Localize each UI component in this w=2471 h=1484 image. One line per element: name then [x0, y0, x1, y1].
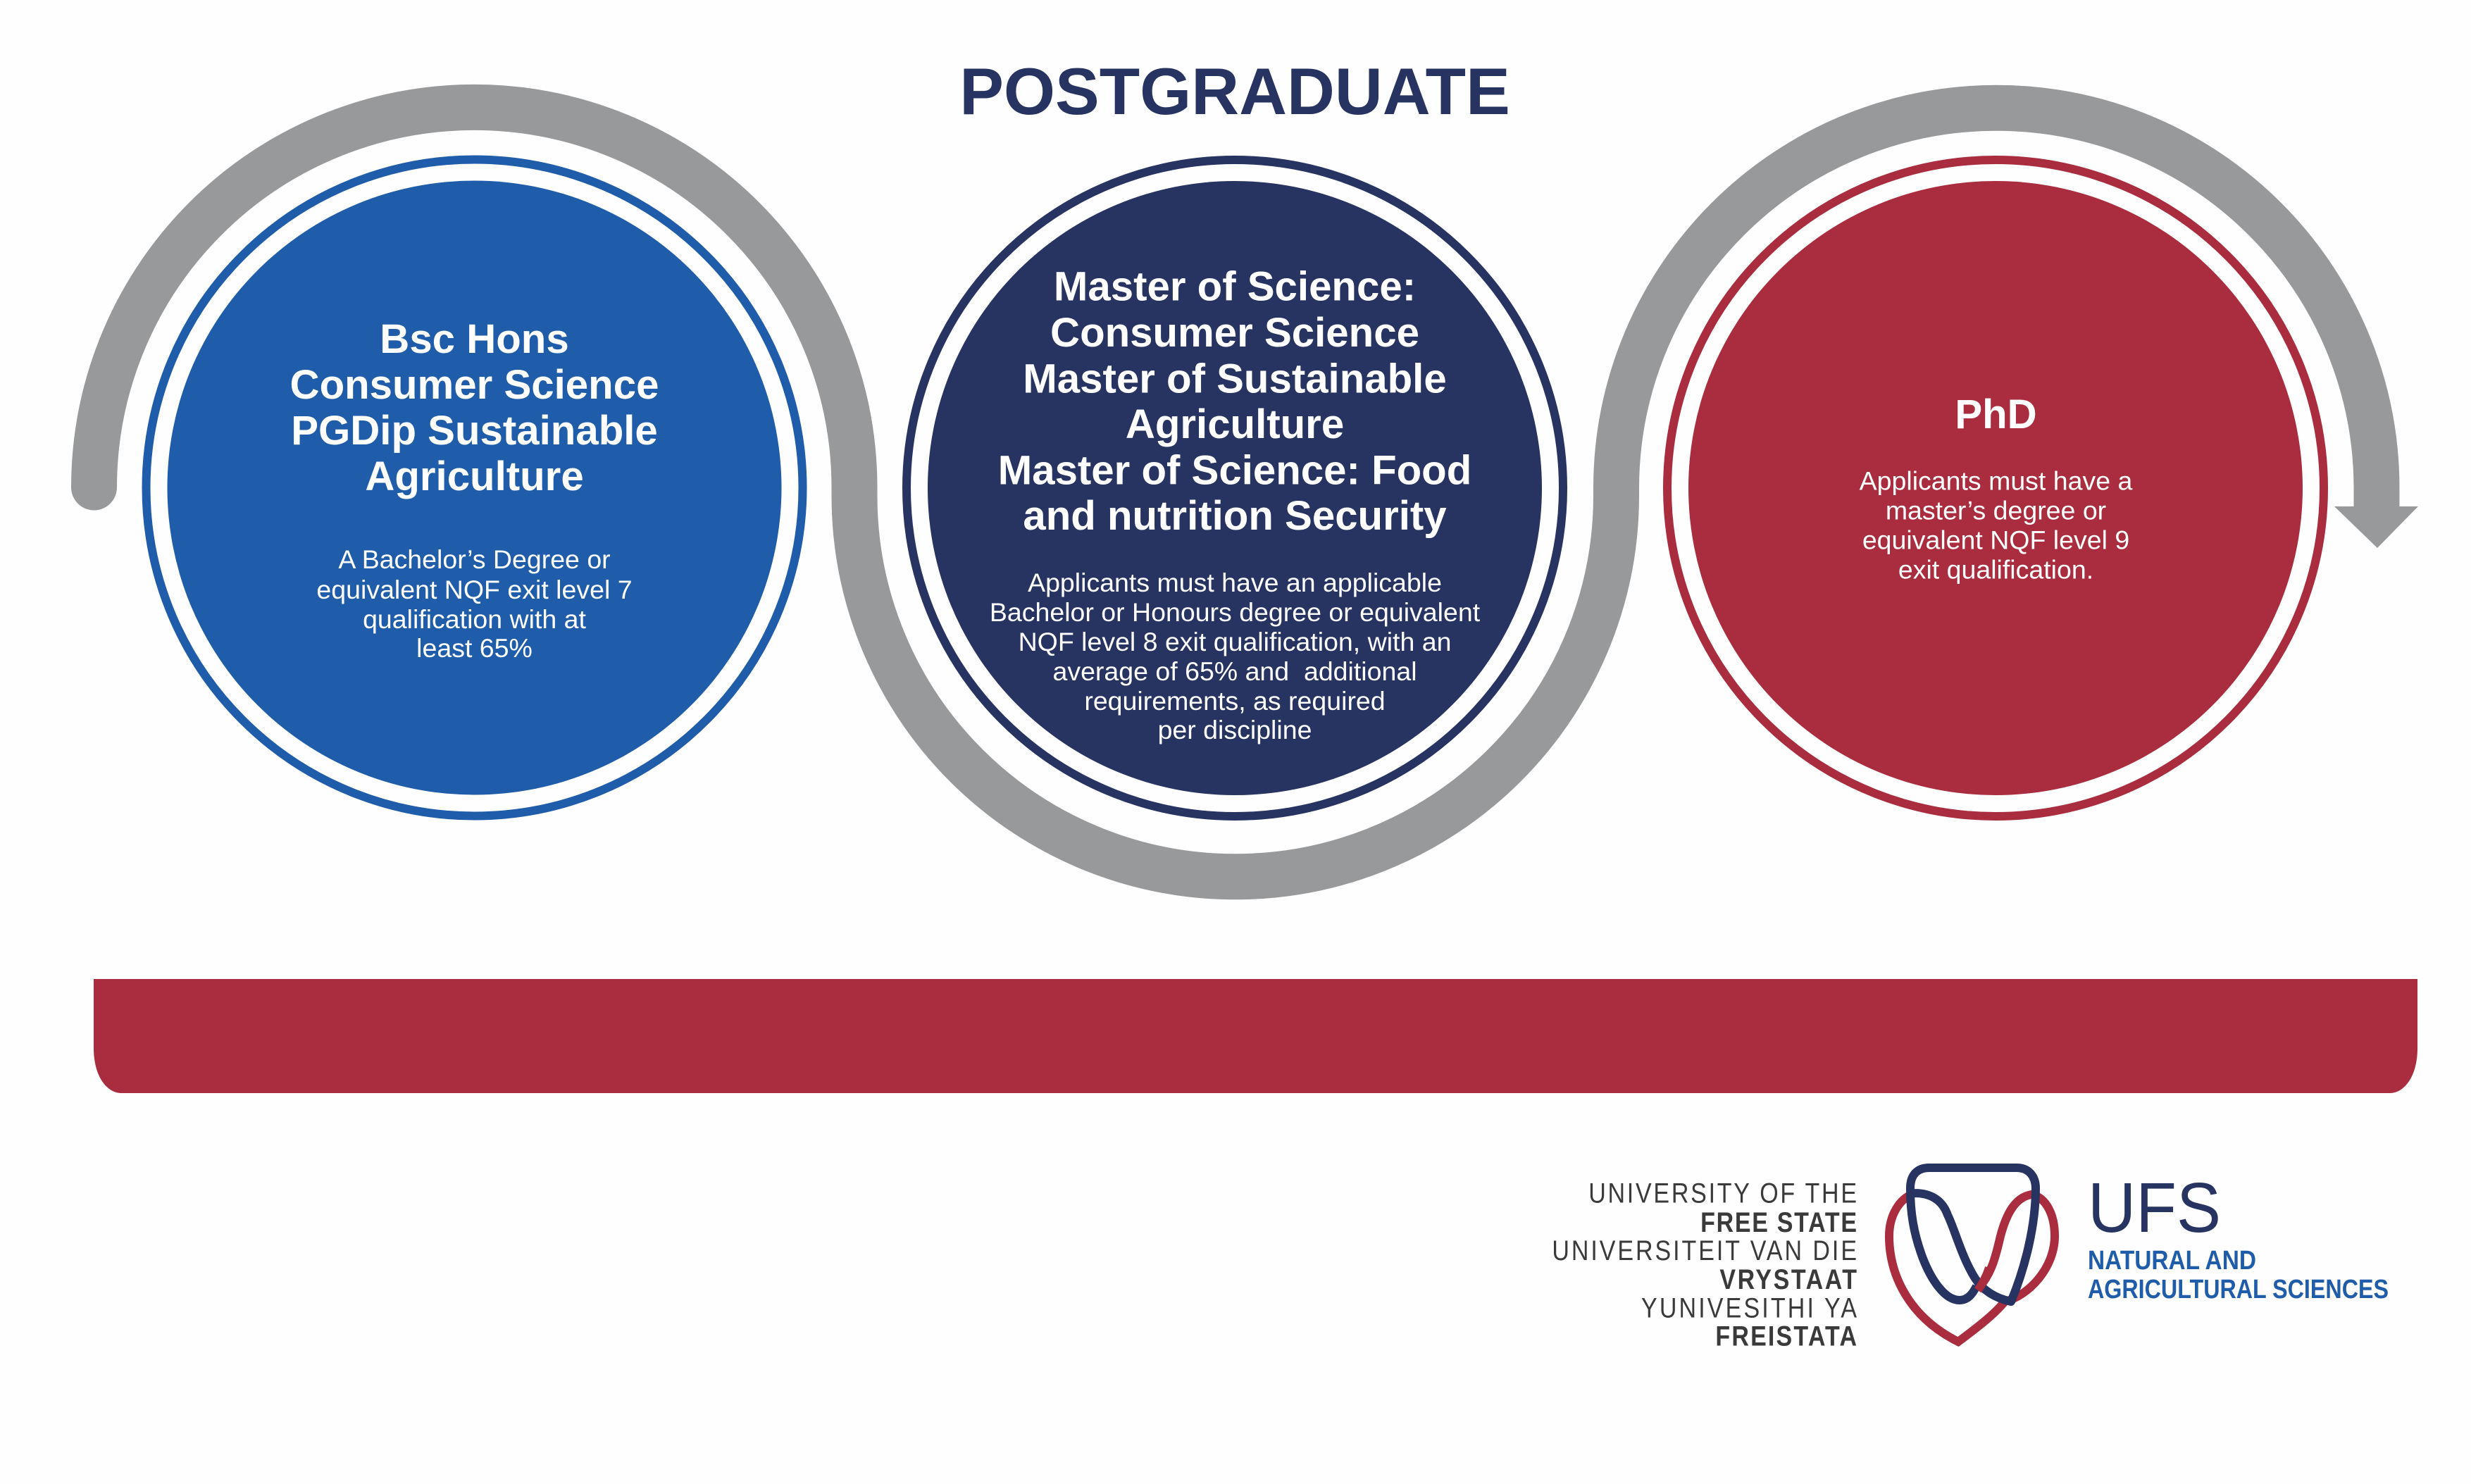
title: POSTGRADUATE — [959, 54, 1510, 128]
text block: PhD requirements: exit qualification. — [1898, 555, 2093, 585]
university name in three languages: FREE STATE — [1700, 1206, 1857, 1238]
heading: Bsc Hons programmes — [290, 316, 659, 499]
university name in three languages: UNIVERSITY OF THE — [1588, 1177, 1857, 1209]
heading: Bsc Hons programmes: Consumer Science — [290, 362, 659, 408]
text block: Bsc Hons requirements: A Bachelor’s Degree or — [338, 544, 611, 574]
panel: Master of Science — [907, 160, 1563, 816]
heading: Masters programmes: Agriculture — [1126, 401, 1344, 447]
text block: PhD requirements: equivalent NQF level 9 — [1862, 525, 2129, 555]
university name in three languages — [1552, 1177, 1857, 1352]
icon: UFS shield emblem — [1889, 1168, 2055, 1342]
text block: PhD requirements: Applicants must have a — [1860, 466, 2132, 496]
text block: Masters requirements: Bachelor or Honours degree or equivalent — [990, 597, 1481, 627]
heading: Masters programmes: and nutrition Security — [1023, 493, 1447, 539]
heading: Masters programmes: Consumer Science — [1050, 310, 1419, 356]
university name in three languages: FREISTATA — [1715, 1320, 1857, 1352]
heading: Bsc Hons programmes: Bsc Hons — [380, 316, 569, 362]
heading: Masters programmes: Master of Science: Food — [998, 448, 1471, 493]
heading: Masters programmes: Master of Science: — [1054, 263, 1416, 310]
heading: Bsc Hons programmes: PGDip Sustainable — [291, 408, 658, 454]
text block: PhD requirements: master’s degree or — [1886, 496, 2106, 525]
text block: Bsc Hons requirements: least 65% — [416, 633, 533, 663]
heading: PhD: PhD — [1955, 392, 2037, 437]
university name in three languages: YUNIVESITHI YA — [1641, 1292, 1857, 1323]
text block: Masters requirements: average of 65% and additional — [1052, 656, 1417, 686]
text block: Masters requirements: per discipline — [1158, 715, 1312, 744]
heading: Masters programmes: Master of Sustainable — [1023, 356, 1447, 401]
text block: Bsc Hons requirements — [316, 544, 633, 663]
text block: Masters requirements — [990, 568, 1481, 744]
faculty name: NATURAL AND — [2088, 1246, 2256, 1276]
university name in three languages: VRYSTAAT — [1719, 1263, 1857, 1295]
text block: Bsc Hons requirements: qualification with at — [363, 604, 586, 634]
arrow: grey winding path connecting the three stages — [71, 107, 2418, 877]
red banner bar — [94, 979, 2417, 1093]
text block: Bsc Hons requirements: equivalent NQF exit level 7 — [316, 575, 633, 604]
logo: University of the Free State — [1552, 1168, 2389, 1352]
text block: Masters requirements: requirements, as required — [1084, 686, 1386, 716]
faculty name: AGRICULTURAL SCIENCES — [2088, 1275, 2389, 1304]
panel: PhD — [1667, 160, 2324, 816]
panel: Bsc Hons — [147, 159, 803, 816]
text block: Masters requirements: NQF level 8 exit qualification, with an — [1019, 627, 1451, 656]
UFS wordmark: UFS — [2088, 1168, 2221, 1247]
text block: Masters requirements: Applicants must have an applicable — [1028, 568, 1442, 597]
university name in three languages: UNIVERSITEIT VAN DIE — [1552, 1234, 1857, 1266]
text block: PhD requirements — [1860, 466, 2132, 585]
faculty name — [2088, 1246, 2389, 1304]
heading: Bsc Hons programmes: Agriculture — [365, 454, 584, 499]
heading: Masters programmes — [998, 263, 1471, 539]
